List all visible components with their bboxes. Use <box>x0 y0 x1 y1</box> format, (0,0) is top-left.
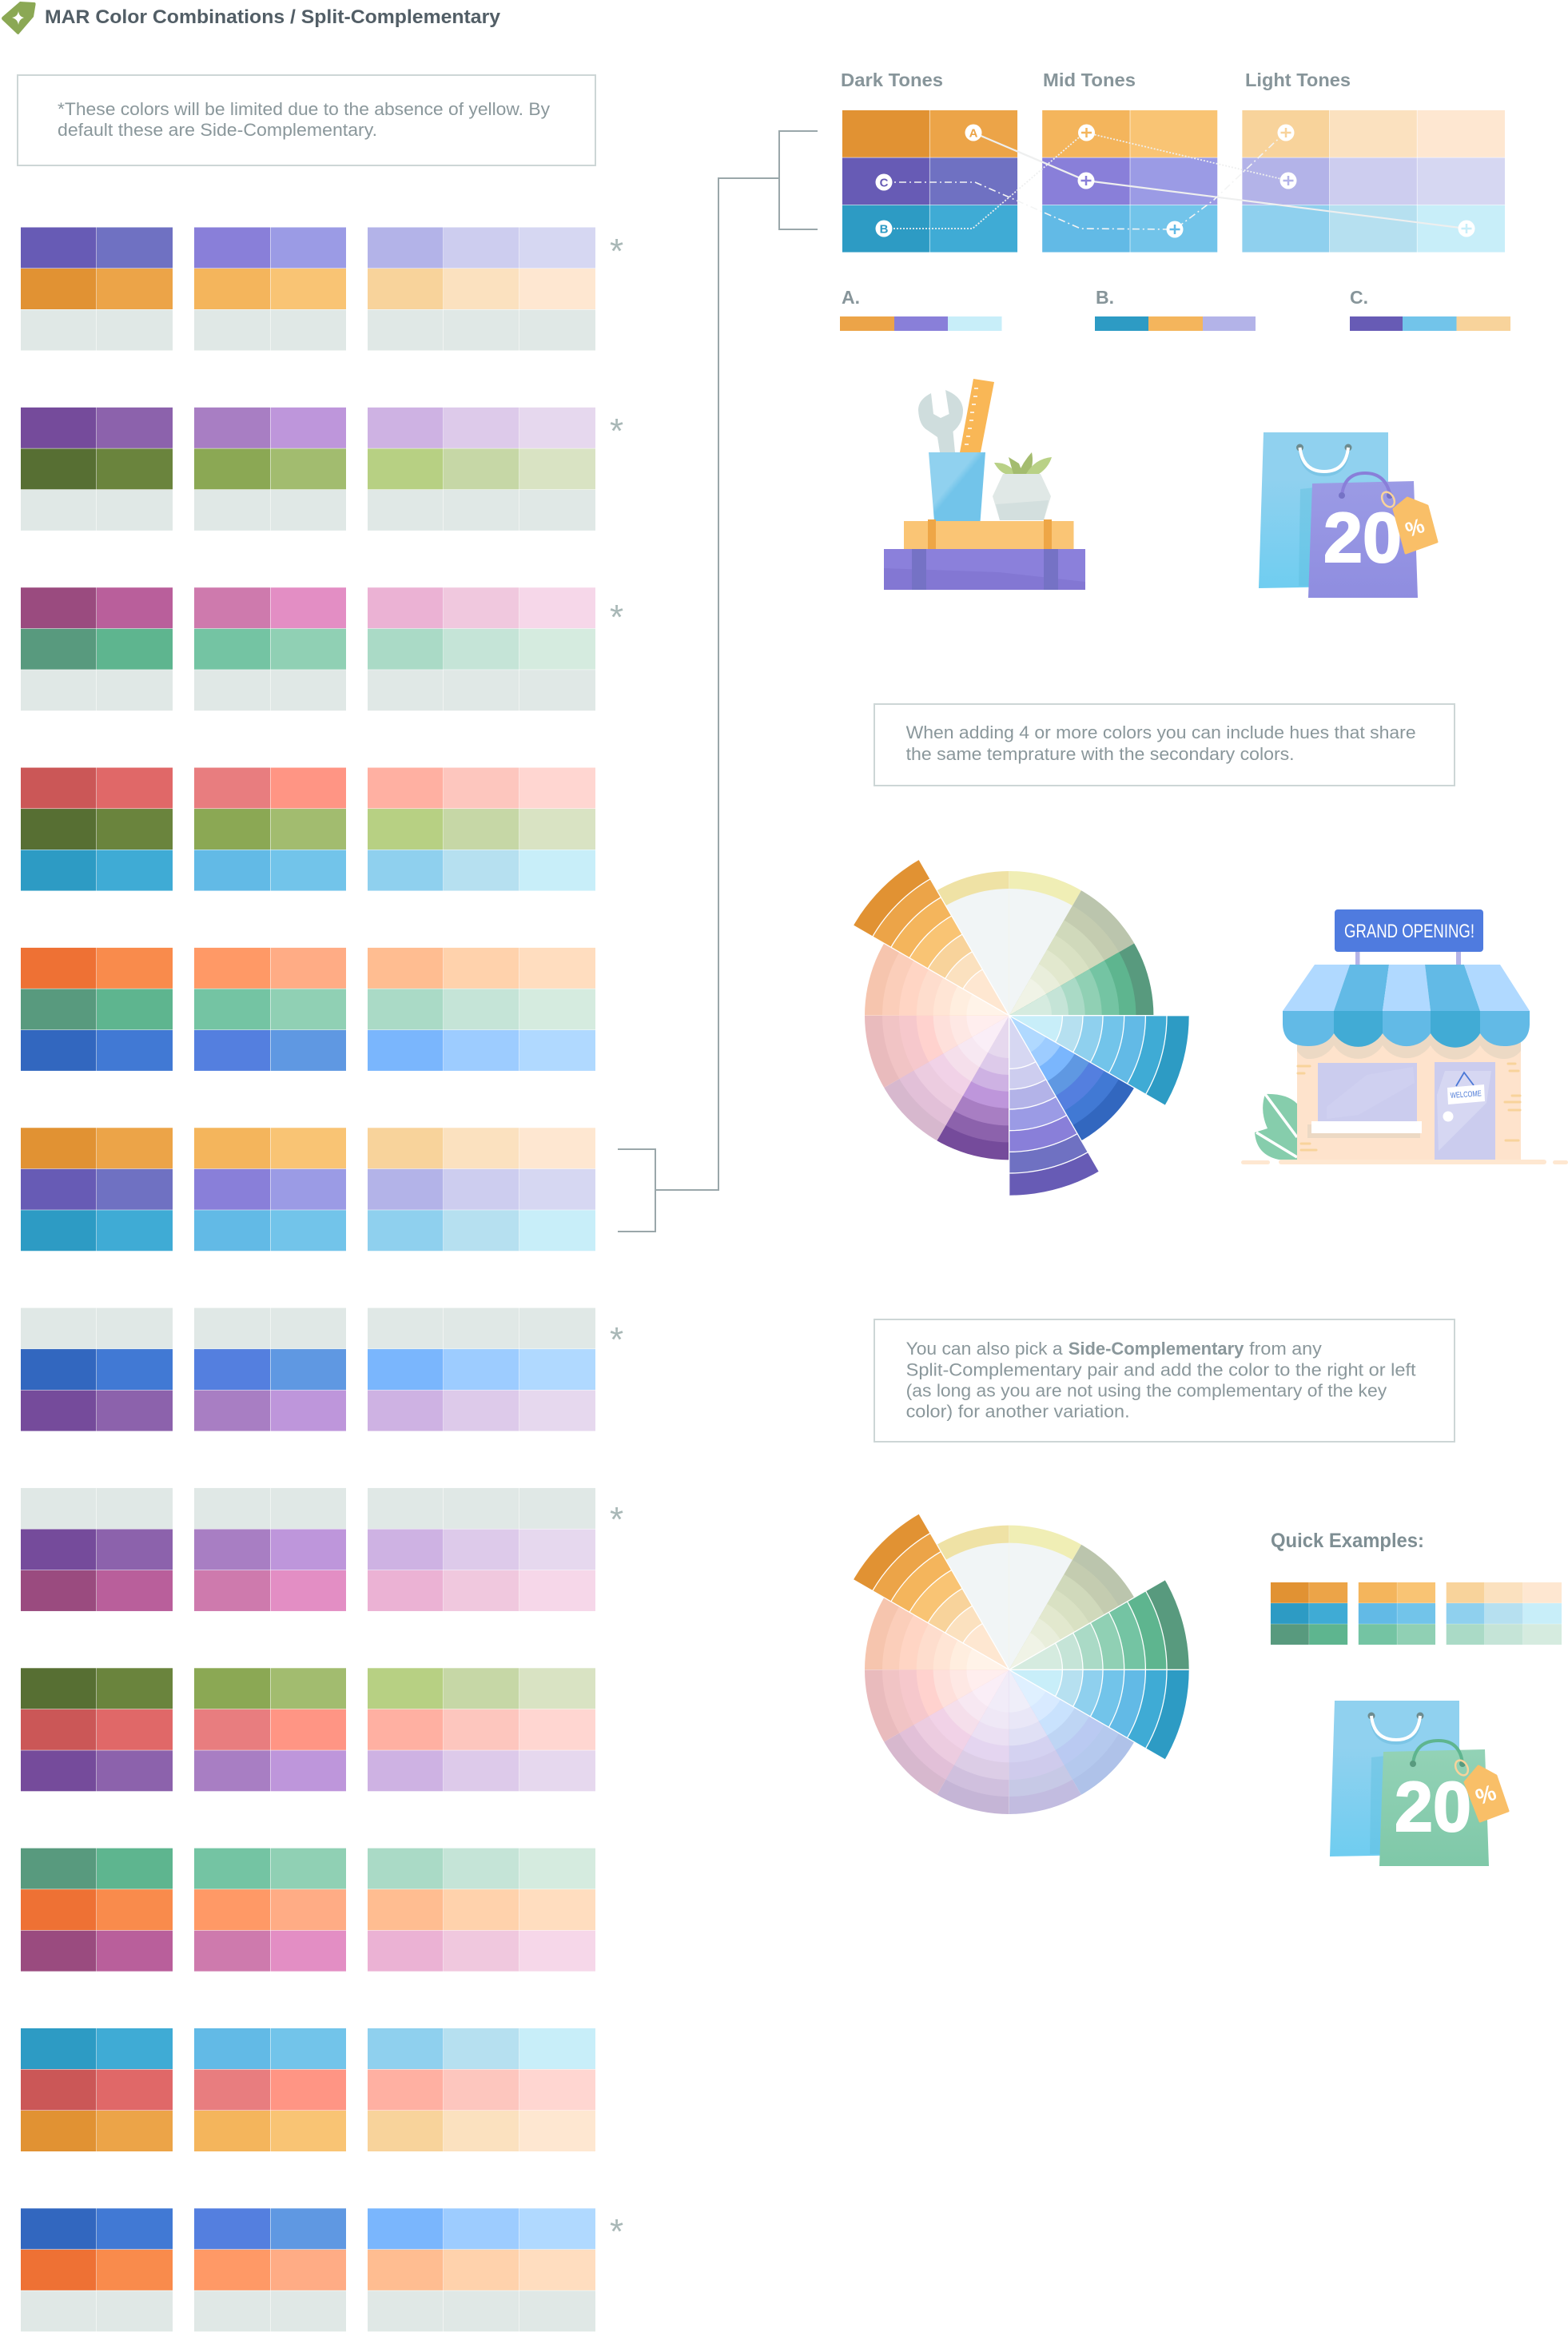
bag handle <box>1368 1712 1424 1743</box>
asterisk 3: * <box>610 598 623 637</box>
note box: adding 4 or more colors: the same temprature with the secondary colors. <box>906 744 1295 764</box>
bag shadow <box>1370 1756 1386 1854</box>
note box: side-complementary: from any <box>1249 1339 1322 1359</box>
asterisk 2: * <box>610 412 623 451</box>
asterisk 8: * <box>610 1500 623 1539</box>
price tag <box>1453 1758 1508 1821</box>
legend A: A. <box>842 287 860 308</box>
heading: page title: MAR Color Combinations / Split-Complementary <box>45 6 501 28</box>
legend C <box>1350 287 1510 331</box>
green bag <box>1379 1749 1489 1866</box>
note box: side-complementary: (as long as you are not using the complementary of the key <box>906 1381 1387 1401</box>
bag shadow <box>1299 487 1315 586</box>
plant leaves <box>994 452 1052 474</box>
window sill <box>1307 1121 1422 1138</box>
legend A <box>840 287 1002 331</box>
markers A B C and plus signs: C <box>880 176 889 190</box>
price tag <box>1379 490 1437 553</box>
tone grid <box>842 110 1505 253</box>
legend B <box>1095 287 1256 331</box>
discount number: 20 <box>1395 1767 1471 1846</box>
markers A B C and plus signs: B <box>880 222 889 237</box>
note box: limited colors: default these are Side-Complementary. <box>58 120 377 140</box>
illustration: books, cup, tools and plant <box>884 379 1085 590</box>
palette row 10: green, deep orange, magenta <box>21 1848 595 1972</box>
line A: solid connector <box>973 133 1467 229</box>
leaves <box>1255 1094 1297 1160</box>
note box: limited colors: *These colors will be limited due to the absence of yellow. By <box>58 99 550 119</box>
quick example palette <box>1271 1582 1562 1645</box>
tone headings: Light Tones <box>1245 70 1351 90</box>
heading: quick examples: Quick Examples: <box>1271 1530 1424 1552</box>
price tag: % <box>1402 513 1427 542</box>
door <box>1435 1062 1495 1160</box>
tone headings: Dark Tones <box>841 70 943 90</box>
icon: green price tag <box>2 2 36 34</box>
plant pot <box>993 474 1051 520</box>
legend C: C. <box>1350 287 1368 308</box>
note box: adding 4 or more colors <box>874 704 1455 786</box>
palette row 4: red, olive, sky <box>21 768 595 891</box>
cup <box>929 452 985 521</box>
sign text: GRAND OPENING! <box>1344 921 1474 942</box>
note box: limited colors <box>18 75 595 165</box>
asterisk 12: * <box>610 2212 623 2251</box>
markers A B C and plus signs: A <box>969 126 978 141</box>
tone headings <box>841 70 1351 90</box>
hanging welcome sign <box>1447 1072 1485 1104</box>
palette row 11: sky, red, orange <box>21 2028 595 2151</box>
illustration: shopping bags with 20% tag (green) <box>1330 1701 1508 1866</box>
line C: dash-dot connector <box>884 133 1286 229</box>
blue bag <box>1330 1701 1459 1856</box>
line B: dotted connector <box>884 133 1288 229</box>
markers A B C and plus signs <box>876 125 1475 238</box>
ground line <box>1241 1160 1568 1164</box>
ruler <box>960 379 994 452</box>
bag handle <box>1296 444 1352 475</box>
tone headings: Mid Tones <box>1043 70 1136 90</box>
note box: side-complementary <box>874 1319 1455 1442</box>
orange book <box>904 519 1074 549</box>
awning <box>1283 965 1530 1048</box>
palette row 6: orange, violet, sky <box>21 1128 595 1251</box>
palette row 1: violet, orange, grey <box>21 227 595 350</box>
palette row 8: grey, purple, magenta <box>21 1488 595 1611</box>
palette row 12: blue, deep orange, grey <box>21 2208 595 2331</box>
title with tag icon <box>2 2 501 34</box>
palette row 3: magenta, green, grey <box>21 587 595 710</box>
note box: adding 4 or more colors: When adding 4 or more colors you can include hues that share <box>906 722 1416 742</box>
awning shadow <box>1297 1031 1521 1060</box>
hanging welcome sign: WELCOME <box>1450 1089 1482 1100</box>
bracket connector from row 6 to tones panel <box>618 131 818 1232</box>
palette row 9: olive, red, purple <box>21 1668 595 1791</box>
discount number: 20 <box>1323 498 1402 577</box>
asterisk 1: * <box>610 232 623 271</box>
purple bag <box>1308 481 1418 598</box>
palette row 7: grey, blue, purple <box>21 1308 595 1431</box>
color wheel 2 <box>854 1514 1189 1814</box>
color wheel 1 <box>854 860 1189 1196</box>
price tag: % <box>1472 1780 1499 1809</box>
note box: side-complementary: You can also pick a <box>906 1339 1063 1359</box>
purple bag handle <box>1339 473 1393 499</box>
panel: dark, mid, light tones <box>840 70 1510 331</box>
legend B: B. <box>1096 287 1114 308</box>
note box: side-complementary: Split-Complementary pair and add the color to the right or left <box>906 1360 1416 1380</box>
building wall <box>1297 1031 1521 1160</box>
window <box>1318 1063 1417 1123</box>
green bag handle <box>1410 1741 1466 1767</box>
illustration: grand opening shop <box>1241 909 1568 1164</box>
blue bag <box>1259 432 1388 588</box>
sign posts <box>1355 952 1461 965</box>
asterisk 7: * <box>610 1320 623 1359</box>
palette row 5: deep orange, green, blue <box>21 948 595 1071</box>
brick marks <box>1298 1064 1520 1150</box>
wrench <box>918 390 963 452</box>
sign board <box>1335 909 1483 952</box>
note box: side-complementary: Side-Complementary <box>1069 1339 1244 1359</box>
purple book <box>884 549 1085 590</box>
illustration: shopping bags with 20% tag (purple) <box>1259 432 1437 598</box>
note box: side-complementary: color) for another variation. <box>906 1401 1130 1421</box>
palette row 2: purple, olive, grey <box>21 408 595 531</box>
